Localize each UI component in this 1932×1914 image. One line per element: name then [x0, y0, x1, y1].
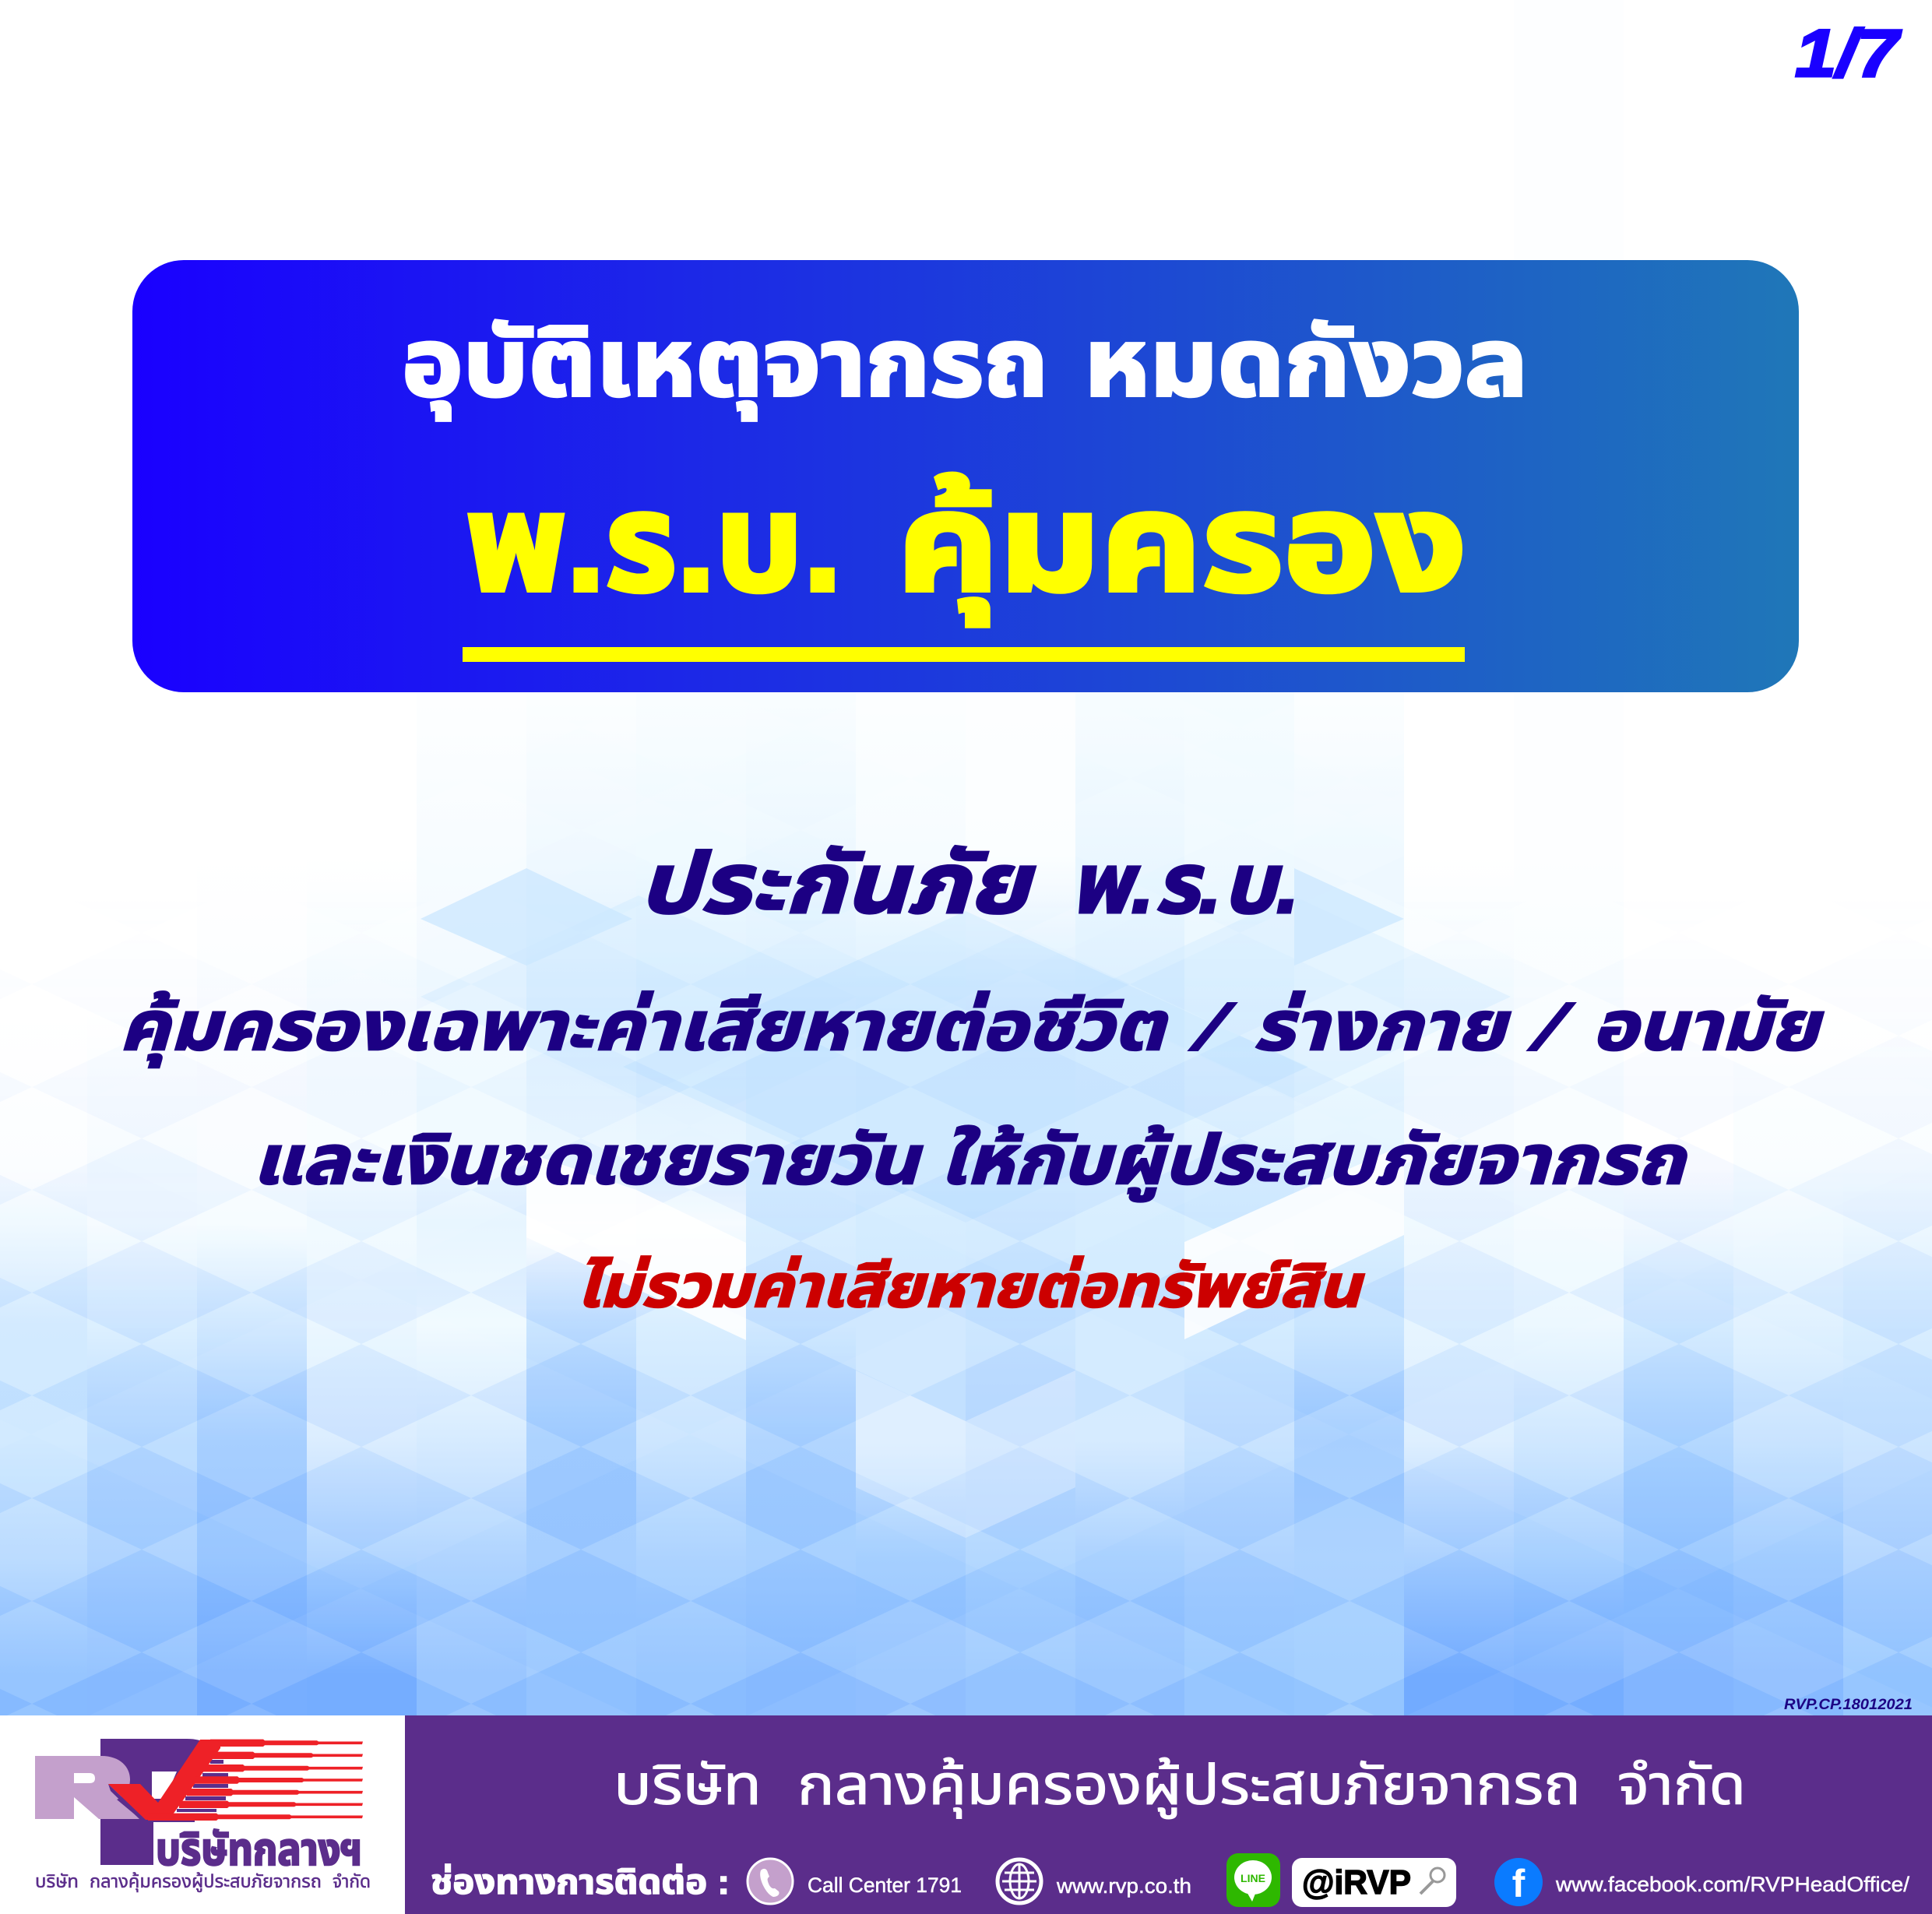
page number: 1/7 [1795, 16, 1902, 91]
icon: facebook: f [1512, 1862, 1526, 1905]
heading line 2: คุ้มครอง [897, 467, 1466, 626]
icon: LINE [1226, 1853, 1280, 1907]
line: insurance name: พ.ร.บ. [1069, 836, 1300, 931]
logo: company full name: บริษัท [35, 1871, 79, 1891]
company name: จำกัด [1617, 1754, 1746, 1817]
facebook url: www.facebook.com/RVPHeadOffice/ [1555, 1873, 1910, 1896]
icon: magnifier [1420, 1868, 1445, 1894]
company name: กลางคุ้มครองผู้ประสบภัยจากรถ [797, 1754, 1581, 1819]
line: coverage: / [1521, 994, 1580, 1061]
line: insurance name [639, 836, 1300, 931]
line: exclusion: ไม่รวมค่าเสียหายต่อทรัพย์สิน [576, 1254, 1364, 1320]
icon: globe [998, 1859, 1041, 1903]
heading line 1: หมดกังวล [1084, 310, 1528, 416]
line: compensation: ให้กับผู้ประสบภัยจากรถ [940, 1121, 1687, 1202]
footer logo panel [0, 1715, 405, 1914]
website text: www.rvp.co.th [1056, 1874, 1191, 1898]
LINE ID box [1292, 1858, 1456, 1907]
icon: facebook [1494, 1858, 1543, 1906]
line: compensation: และเงินชดเชยรายวัน [252, 1121, 923, 1198]
background: triangular blue pattern [0, 692, 1932, 1715]
heading line 2 [466, 467, 1466, 626]
line: coverage: / [1182, 994, 1241, 1061]
footer contact panel [405, 1715, 1932, 1914]
company name [614, 1754, 1746, 1819]
logo: company short name: บริษัทกลางฯ [156, 1824, 362, 1875]
logo: company full name [35, 1871, 371, 1893]
body text [119, 836, 1824, 1320]
heading line 1 [402, 310, 1528, 420]
logo: company full name: จำกัด [333, 1871, 371, 1891]
underline [463, 647, 1465, 662]
icon: LINE: LINE [1240, 1872, 1265, 1884]
line: coverage: ร่างกาย [1253, 987, 1511, 1064]
heading line 2: พ.ร.บ. [466, 467, 842, 620]
title panel [132, 260, 1799, 692]
call center text: Call Center 1791 [808, 1874, 962, 1897]
document code: RVP.CP.18012021 [1784, 1697, 1913, 1713]
logo: RVP mark [35, 1739, 363, 1865]
line: insurance name: ประกันภัย [639, 836, 1036, 931]
line: coverage [119, 987, 1824, 1068]
contact label: ช่องทางการติดต่อ : [431, 1863, 730, 1902]
company name: บริษัท [614, 1754, 762, 1817]
LINE ID box: @iRVP [1302, 1863, 1411, 1902]
heading line 1: อุบัติเหตุจากรถ [402, 310, 1048, 420]
logo: company full name: กลางคุ้มครองผู้ประสบภัยจากรถ [90, 1871, 322, 1893]
line: coverage: อนามัย [1592, 987, 1824, 1064]
icon: phone [748, 1859, 793, 1904]
line: coverage: คุ้มครองเฉพาะค่าเสียหายต่อชีวิต [119, 987, 1169, 1068]
line: compensation [252, 1121, 1687, 1202]
